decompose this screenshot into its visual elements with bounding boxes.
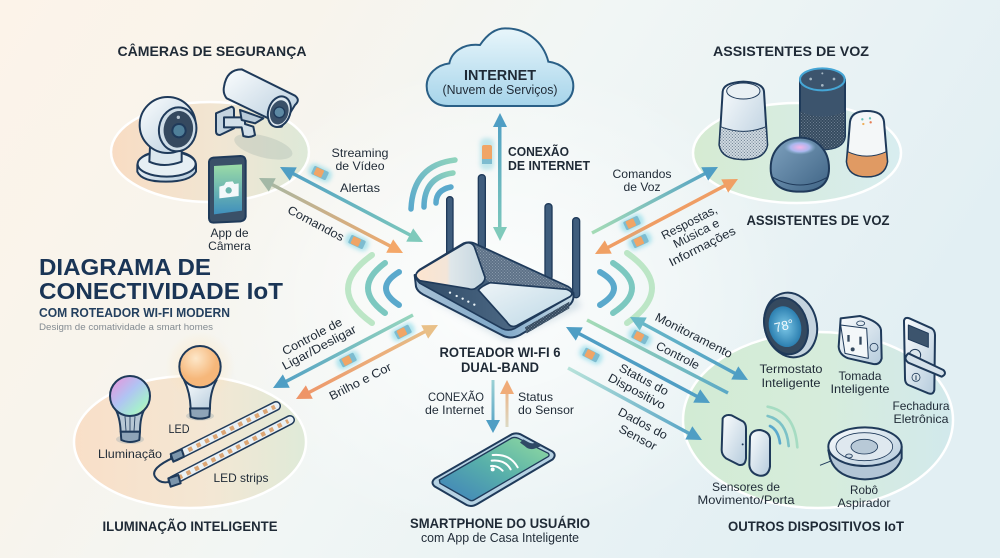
panel: câmeras de segurança <box>111 42 309 253</box>
label: conexão de internet: CONEXÃO <box>508 144 569 159</box>
labels: iot links: Status do <box>617 361 671 398</box>
labels: iot links: Dados do <box>616 405 670 442</box>
data packets: iot <box>577 326 654 366</box>
arrow: internet link <box>493 113 507 241</box>
labels: lighting: Lluminação <box>98 447 162 461</box>
arrow: status do dispositivo <box>563 320 713 410</box>
arrow: dados do sensor <box>568 368 706 447</box>
icons: smart speakers <box>719 68 887 192</box>
label: roteador: ROTEADOR WI-FI 6 <box>440 345 561 360</box>
label: roteador <box>440 345 561 375</box>
labels: voice links: Comandos <box>612 167 672 181</box>
arrow: conexão de internet to smartphone <box>486 380 500 433</box>
labels: camera links <box>285 146 388 244</box>
labels: camera links: Alertas <box>340 181 380 195</box>
internet cloud: (Nuvem de Serviços) <box>442 83 558 97</box>
labels: lighting links: Brilho e Cor <box>327 360 394 403</box>
labels: phone links: CONEXÃO <box>428 390 484 404</box>
labels: lighting links: Controle de <box>280 315 345 358</box>
labels: iot devices: Inteligente <box>762 376 821 390</box>
title block <box>39 254 283 333</box>
heading: smartphone: SMARTPHONE DO USUÁRIO <box>410 515 590 531</box>
internet cloud: INTERNET <box>464 67 536 84</box>
labels: lighting: LED <box>168 422 190 436</box>
thermostat reading: 78° <box>773 316 795 335</box>
labels: camera links: de Vídeo <box>336 159 385 173</box>
arrow: comandos <box>256 171 406 260</box>
data packet: internet <box>480 138 494 170</box>
labels: iot links: Dispositivo <box>606 370 668 413</box>
label: app de casa: com App de Casa Inteligente <box>421 531 579 545</box>
router <box>415 175 582 342</box>
panel: iluminação inteligente <box>74 332 306 534</box>
labels: lighting links: Ligar/Desligar <box>280 322 359 373</box>
arrow: monitoramento <box>626 310 752 387</box>
title block: CONECTIVIDADE IoT <box>39 278 283 304</box>
label: conexão de internet: DE INTERNET <box>508 159 590 173</box>
wifi waves <box>348 160 652 323</box>
labels: iot devices: Fechadura <box>892 399 950 413</box>
title block: COM ROTEADOR WI-FI MODERN <box>39 306 230 320</box>
icons: bulbs and led strips <box>110 332 290 487</box>
labels: voice links: Música e <box>671 216 722 251</box>
label: app de câmera: Câmera <box>208 239 251 253</box>
labels: iot links: Monitoramento <box>653 310 735 361</box>
labels: lighting links <box>280 315 394 403</box>
internet cloud <box>427 28 573 106</box>
arrow: streaming <box>277 160 426 249</box>
heading: assistentes de voz: ASSISTENTES DE VOZ <box>713 43 869 59</box>
arrow: respostas <box>592 172 741 261</box>
arrow: comandos de voz <box>592 160 721 233</box>
data packets: camera <box>306 162 371 253</box>
label: roteador: DUAL-BAND <box>461 360 539 375</box>
labels: iot devices: Robô <box>850 483 878 497</box>
data packets: lighting <box>334 321 417 371</box>
heading: câmeras: CÂMERAS DE SEGURANÇA <box>118 42 306 59</box>
icons: cameras and phone <box>137 69 298 223</box>
icons: iot devices <box>722 287 945 479</box>
blob: iluminação <box>74 376 306 508</box>
data packets: voice <box>618 212 654 252</box>
arrow: status do sensor <box>500 380 514 427</box>
labels: camera links: Streaming <box>332 146 388 160</box>
blob: voz <box>693 103 901 203</box>
labels: phone links: do Sensor <box>518 403 574 417</box>
icon: smartphone <box>432 433 555 506</box>
arrow: controle de ligar/desligar <box>270 315 413 395</box>
heading: iluminação inteligente: ILUMINAÇÃO INTELIGENTE <box>102 517 278 534</box>
title block: Desigm de comatividade a smart homes <box>39 322 213 333</box>
title block: DIAGRAMA DE <box>39 254 211 280</box>
labels: voice links: Respostas, <box>659 202 720 243</box>
blob: iot <box>683 332 953 508</box>
labels: iot devices: Movimento/Porta <box>698 493 795 507</box>
label: assistentes de voz 2: ASSISTENTES DE VOZ <box>746 212 890 228</box>
labels: voice links <box>612 167 738 269</box>
labels: phone links: Status <box>518 390 553 404</box>
antennas <box>447 175 580 298</box>
labels: voice links: de Voz <box>624 180 660 194</box>
labels: iot devices: Termostato <box>760 362 823 376</box>
labels: camera links: Comandos <box>285 203 347 244</box>
labels: iot devices: Eletrônica <box>894 412 949 426</box>
blob: câmeras <box>111 102 309 202</box>
line: controle <box>587 320 728 393</box>
labels: iot devices: Tomada <box>838 369 882 383</box>
label: conexão de internet <box>508 144 590 173</box>
labels: lighting <box>98 422 268 485</box>
labels: iot devices: Inteligente <box>830 382 890 396</box>
arrow: brilho e cor <box>293 318 441 406</box>
labels: iot links: Sensor <box>616 422 659 453</box>
panel: outros dispositivos iot <box>683 287 953 534</box>
labels: iot links <box>606 310 735 453</box>
heading: outros dispositivos: OUTROS DISPOSITIVOS IoT <box>728 518 904 534</box>
labels: iot devices: Aspirador <box>838 496 891 510</box>
labels: phone links: de Internet <box>425 403 485 417</box>
router body <box>415 275 574 337</box>
labels: iot devices <box>698 362 950 510</box>
label: app de câmera: App de <box>210 226 249 240</box>
smartphone <box>410 433 590 545</box>
labels: phone links <box>425 390 574 417</box>
labels: iot links: Controle <box>654 339 702 372</box>
labels: iot devices: Sensores de <box>712 480 780 494</box>
labels: voice links: Informações <box>666 224 738 269</box>
panel: assistentes de voz <box>693 43 901 228</box>
labels: lighting: LED strips <box>214 471 268 485</box>
